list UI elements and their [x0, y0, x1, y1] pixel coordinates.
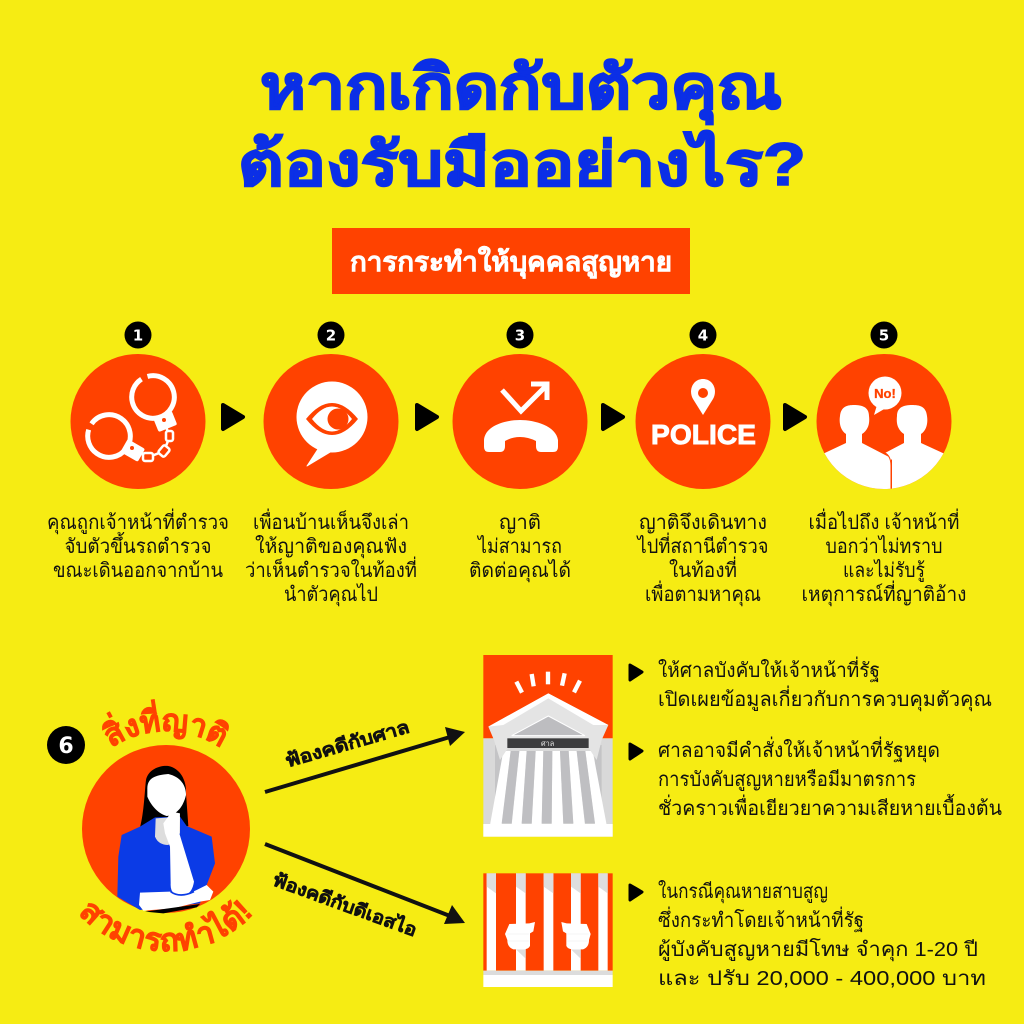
heading banner: การกระทำให้บุคคลสูญหาย	[350, 246, 672, 279]
step 4 badge	[690, 322, 716, 348]
curved heading bottom: สามารถทำได้!	[80, 899, 252, 952]
title	[238, 54, 806, 198]
arrow to court	[265, 727, 465, 792]
step 6 badge: 6	[58, 734, 74, 759]
heading banner	[332, 228, 690, 294]
step 5 text: เมื่อไปถึง เจ้าหน้าที่	[808, 508, 960, 534]
step 2 text: ว่าเห็นตำรวจในท้องที่	[245, 556, 417, 582]
step 1	[47, 322, 229, 582]
step 2 text: ให้ญาติของคุณฟัง	[255, 535, 407, 559]
bullet: court order 1: เปิดเผยข้อมูลเกี่ยวกับการควบคุมตัวคุณ	[658, 685, 992, 712]
step 5 text: และไม่รับรู้	[843, 559, 925, 583]
step 1 text: คุณถูกเจ้าหน้าที่ตำรวจ	[47, 508, 229, 535]
step 4 badge: 4	[698, 326, 708, 344]
icon: hands on jail bars	[483, 873, 613, 987]
icon: police location pin	[636, 354, 770, 489]
step 4 text: ไปที่สถานีตำรวจ	[636, 532, 768, 558]
bullet: court order 2	[630, 736, 1002, 820]
step 5 badge: 5	[879, 326, 889, 344]
bullet: penalty: และ ปรับ 20,000 - 400,000 บาท	[658, 968, 986, 990]
step 3 text	[469, 512, 571, 583]
bullet: court order 2: ศาลอาจมีคำสั่งให้เจ้าหน้าที่รัฐหยุด	[658, 736, 940, 763]
bullet: penalty: ในกรณีคุณหายสาบสูญ	[658, 880, 828, 904]
step 3 text: ญาติ	[499, 512, 541, 534]
step 3	[452, 322, 588, 583]
label: sue in court: ฟ้องคดีกับศาล	[283, 717, 412, 771]
bullet: court order 2: การบังคับสูญหายหรือมีมาตรการ	[658, 769, 916, 792]
arrow to DSI	[265, 844, 465, 924]
step 5 badge	[870, 322, 898, 348]
step 5 text	[802, 508, 966, 607]
bullet: penalty	[630, 880, 986, 990]
step 5 text: เหตุการณ์ที่ญาติอ้าง	[802, 580, 966, 607]
icon: courthouse	[483, 655, 613, 837]
step 4	[636, 322, 770, 607]
bullet: penalty: ซึ่งกระทำโดยเจ้าหน้าที่รัฐ	[658, 906, 864, 932]
step 1 text: ขณะเดินออกจากบ้าน	[53, 560, 223, 582]
curved heading top: สิ่งที่ญาติ	[102, 699, 229, 748]
step 1 text: จับตัวขึ้นรถตำรวจ	[64, 532, 212, 558]
title: หากเกิดกับตัวคุณ	[260, 54, 782, 125]
step 2 badge	[318, 322, 344, 348]
bullet: penalty: ผู้บังคับสูญหายมีโทษ จำคุก 1-20 ปี	[658, 938, 978, 962]
title: ต้องรับมืออย่างไร?	[238, 129, 806, 198]
step 2 text: เพื่อนบ้านเห็นจึงเล่า	[253, 508, 409, 534]
step 4 text: ญาติจึงเดินทาง	[639, 512, 767, 534]
step 4 text	[636, 512, 768, 607]
step 3 text: ติดต่อคุณได้	[469, 559, 571, 583]
step 3 badge	[506, 322, 534, 348]
step 2 text	[245, 508, 417, 607]
icon: eye in speech bubble	[264, 354, 398, 489]
step 1 badge: 1	[133, 326, 143, 344]
step 2	[245, 322, 417, 607]
step 2 badge: 2	[326, 326, 336, 344]
icon: thinking woman	[82, 745, 250, 913]
bullet: court order 1	[630, 656, 992, 712]
arrow 1 to 2	[223, 405, 243, 429]
icon: courthouse: ศาล	[541, 739, 554, 748]
step 3 text: ไม่สามารถ	[476, 535, 562, 558]
arrow 3 to 4	[603, 405, 623, 429]
step 1 text	[47, 508, 229, 582]
icon: two people and No speech bubble	[816, 354, 952, 489]
bullet: court order 1: ให้ศาลบังคับให้เจ้าหน้าที่รัฐ	[658, 656, 880, 682]
step 5 text: บอกว่าไม่ทราบ	[826, 535, 942, 558]
arrow 2 to 3	[417, 405, 437, 429]
step 3 badge: 3	[515, 326, 525, 344]
label: sue with DSI: ฟ้องคดีกับดีเอสไอ	[270, 869, 420, 940]
step 4 text: เพื่อตามหาคุณ	[645, 580, 761, 607]
step 2 text: นำตัวคุณไป	[284, 583, 378, 607]
step 1 badge	[124, 322, 152, 348]
step 6 badge	[47, 726, 85, 764]
icon: police location pin: POLICE	[651, 419, 756, 450]
step 4 text: ในท้องที่	[669, 556, 737, 582]
icon: two people and No speech bubble: No!	[874, 386, 896, 401]
icon: handcuffs	[70, 354, 206, 489]
icon: missed call phone	[452, 354, 588, 489]
bullet: court order 2: ชั่วคราวเพื่อเยียวยาความเสียหายเบื้องต้น	[658, 794, 1002, 820]
arrow 4 to 5	[785, 405, 805, 429]
step 5	[802, 322, 966, 607]
